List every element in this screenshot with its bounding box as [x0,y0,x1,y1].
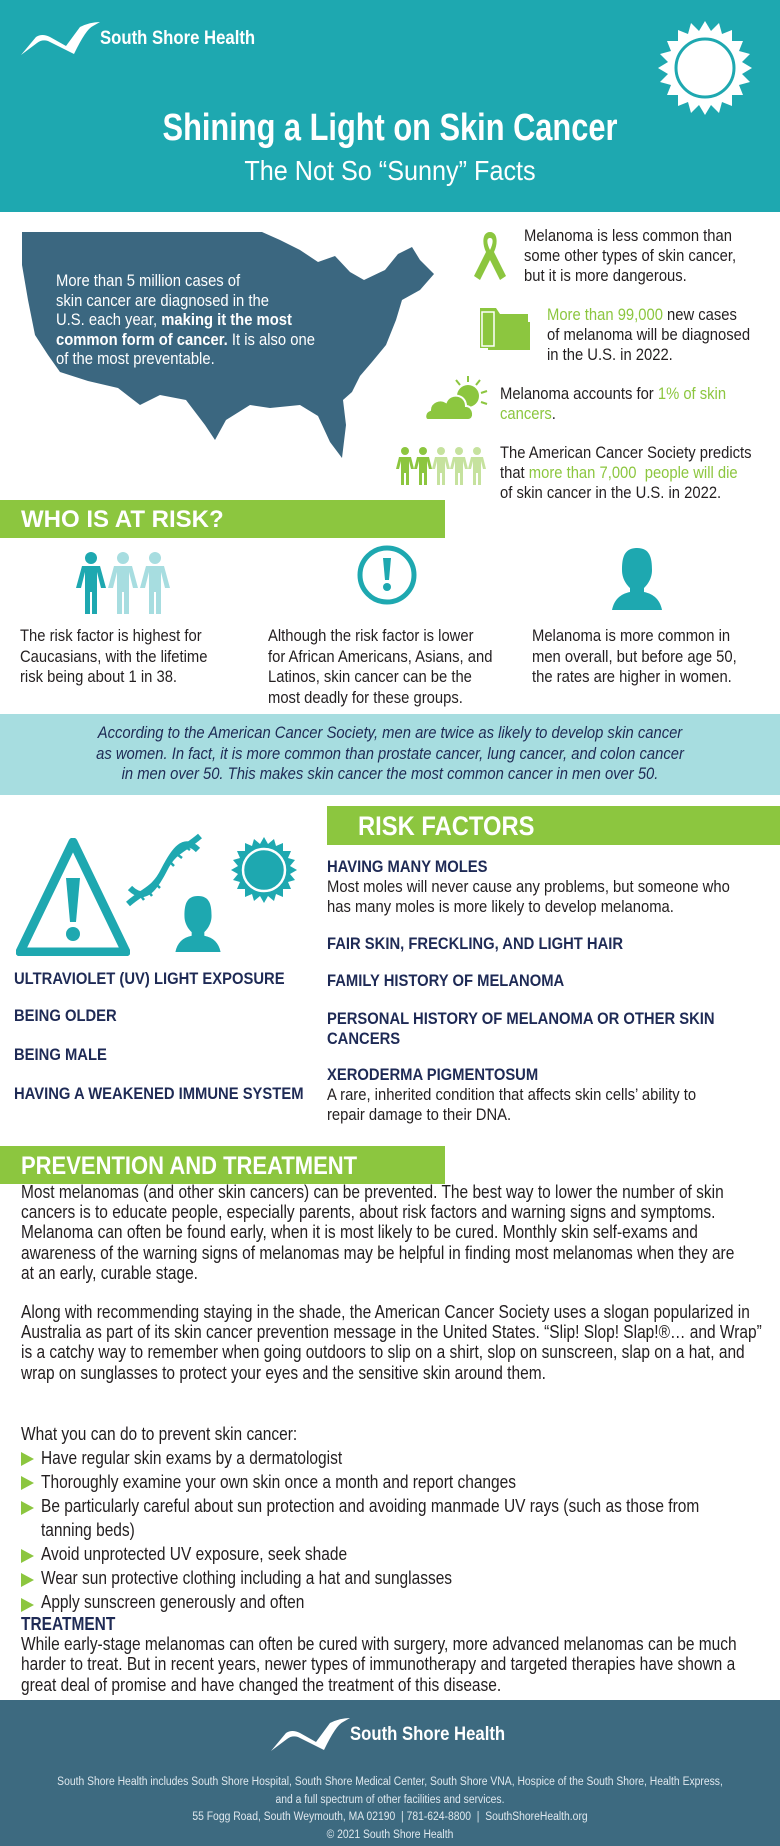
footer text [57,1776,723,1840]
fact: ribbon [474,226,736,285]
list: right risk factors: has many moles is more likely to develop melanoma. [327,897,674,916]
list: right risk factors: HAVING MANY MOLES [327,857,488,876]
logo: South Shore Health [100,28,255,49]
fact: folder: More than 99,000 new cases [547,305,737,324]
text: treatment [21,1614,737,1695]
fact: people: of skin cancer in the U.S. in 2022. [500,483,721,502]
list: prevention tips: Wear sun protective clothing including a hat and sunglasses [41,1568,452,1588]
icon: ribbon [474,232,506,280]
list: right risk factors: FAMILY HISTORY OF MELANOMA [327,971,564,990]
list: right risk factors: Most moles will never cause any problems, but someone who [327,877,730,896]
text: wrap on sunglasses to protect your eyes and the sensitive skin around them. [21,1363,546,1383]
title: Shining a Light on Skin Cancer [163,107,617,149]
fact: ribbon: Melanoma is less common than [524,226,732,245]
heading: prevention and treatment: PREVENTION AND TREATMENT [21,1152,357,1180]
column: caucasians: The risk factor is highest for [20,626,202,645]
list: right risk factors: XERODERMA PIGMENTOSUM [327,1065,538,1084]
list: left risk factors: BEING OLDER [14,1006,117,1025]
text: treatment: While early-stage melanomas can often be cured with surgery, more advanced melanomas can be much [21,1634,737,1654]
column: other groups: Latinos, skin cancer can be the [268,667,472,686]
icon: three people [76,552,170,614]
list: prevention tips [21,1424,699,1612]
icon: dna [126,834,202,906]
list: prevention tips: Have regular skin exams by a dermatologist [41,1448,342,1468]
text: is a catchy way to remember when going outdoors to slip on a shirt, slop on sunscreen, slap on a hat, and [21,1342,745,1362]
column: caucasians [20,552,207,686]
fact: ribbon: some other types of skin cancer, [524,246,736,265]
map text: More than 5 million cases of [56,271,240,290]
heading: who is at risk: WHO IS AT RISK? [21,506,224,533]
column: caucasians: Caucasians, with the lifetime [20,646,207,666]
logo [21,22,255,55]
icon: sun [658,21,752,115]
heading: risk factors [327,806,780,845]
map text: skin cancer are diagnosed in the [56,290,269,310]
text: prevention paragraphs: awareness of the warning signs of melanomas may be helpful in finding most melanomas when they are [21,1243,734,1263]
callout band: in men over 50. This makes skin cancer the most common cancer in men over 50. [122,764,658,783]
callout band: According to the American Cancer Society, men are twice as likely to develop skin cancer [98,723,682,742]
list: right risk factors: CANCERS [327,1029,400,1048]
icon: head [612,548,662,610]
footer text: © 2021 South Shore Health [327,1828,453,1840]
map text: common form of cancer. It is also one [56,330,315,348]
map panel [22,232,434,458]
text: Along with recommending staying in the shade, the American Cancer Society uses a slogan popularized in [21,1302,750,1322]
fact: cloud [426,376,726,423]
icon: bullet arrows [21,1452,34,1612]
fact: cloud: cancers. [500,404,556,423]
heading: who is at risk [0,500,445,538]
list: left risk factors: ULTRAVIOLET (UV) LIGHT EXPOSURE [14,969,285,988]
map text: of the most preventable. [56,349,215,368]
list: left risk factors: HAVING A WEAKENED IMMUNE SYSTEM [14,1084,304,1103]
footer text: 55 Fogg Road, South Weymouth, MA 02190 | 781-624-8800 | SouthShoreHealth.org [192,1811,588,1823]
footer logo [271,1718,505,1751]
column: other groups: most deadly for these groups. [268,688,463,706]
list: right risk factors: repair damage to their DNA. [327,1105,511,1124]
column: men: the rates are higher in women. [532,667,732,686]
list: left risk factors [14,969,304,1103]
footer [0,1700,780,1846]
callout band: as women. In fact, it is more common than prostate cancer, lung cancer, and colon cancer [96,744,684,762]
text: prevention paragraphs [21,1182,734,1283]
column: men: men overall, but before age 50, [532,646,737,666]
icon: folder [480,308,530,350]
list: right risk factors: PERSONAL HISTORY OF MELANOMA OR OTHER SKIN [327,1009,715,1028]
fact: people: that more than 7,000 people will die [500,463,738,482]
map text: U.S. each year, making it the most [56,310,292,329]
column: men: Melanoma is more common in [532,626,730,645]
text: prevention paragraphs: at an early, curable stage. [21,1263,198,1283]
callout band [0,714,780,795]
icon group: risk icons [16,834,297,956]
list: right risk factors: FAIR SKIN, FRECKLING, AND LIGHT HAIR [327,934,623,953]
text: prevention paragraphs: Melanoma can often be found early, when it is most likely to be cured. Monthly skin self-exams and [21,1222,698,1242]
column: other groups: for African Americans, Asians, and [268,646,492,666]
footer text: South Shore Health includes South Shore Hospital, South Shore Medical Center, South Shore VNA, Hospice of the South Shore, Health Express, [57,1776,723,1788]
subtitle: The Not So “Sunny” Facts [244,155,536,186]
map text [56,271,315,368]
list: prevention tips: Avoid unprotected UV exposure, seek shade [41,1544,347,1564]
list: prevention tips: Apply sunscreen generously and often [41,1592,304,1612]
list: left risk factors: BEING MALE [14,1045,107,1064]
list: right risk factors [327,857,730,1124]
icon: sun [231,837,297,903]
icon: people [396,447,486,485]
list: prevention tips: What you can do to prevent skin cancer: [21,1424,297,1444]
list: prevention tips: Be particularly careful about sun protection and avoiding manmade UV rays (such as those from [41,1496,699,1516]
column: other groups: Although the risk factor is lower [268,626,474,645]
icon: US map [22,232,434,458]
column: other groups [268,546,492,706]
icon: person [175,896,221,952]
heading: risk factors: RISK FACTORS [358,811,534,841]
fact: cloud: Melanoma accounts for 1% of skin [500,384,726,403]
column: men [532,548,737,686]
list: prevention tips: Thoroughly examine your own skin once a month and report changes [41,1472,516,1492]
text: treatment: harder to treat. But in recent years, newer types of immunotherapy and targeted therapies have shown a [21,1654,735,1674]
footer logo: South Shore Health [350,1724,505,1745]
fact: folder: in the U.S. in 2022. [547,345,673,364]
icon: sun cloud [426,376,488,419]
list: right risk factors: A rare, inherited condition that affects skin cells’ ability to [327,1085,696,1104]
text: Australia as part of its skin cancer prevention message in the United States. “Slip! Slop! Slap!®… and Wrap” [21,1322,762,1342]
column: caucasians: risk being about 1 in 38. [20,667,177,686]
text: treatment: great deal of promise and have changed the treatment of this disease. [21,1675,501,1695]
fact: people: The American Cancer Society predicts [500,443,752,462]
footer text: and a full spectrum of other facilities and services. [276,1794,504,1806]
fact: ribbon: but it is more dangerous. [524,266,687,285]
fact: people [396,443,752,502]
text: prevention paragraphs: Most melanomas (and other skin cancers) can be prevented. The best way to lower the number of skin [21,1182,724,1202]
fact: folder [480,305,750,364]
text: prevention paragraphs: cancers is to educate people, especially parents, about risk factors and warning signs and symptoms. [21,1202,715,1222]
fact: folder: of melanoma will be diagnosed [547,325,750,344]
heading: prevention and treatment [0,1146,445,1184]
list: prevention tips: tanning beds) [41,1520,135,1540]
icon: exclamation circle [358,546,416,604]
header [0,0,780,212]
icon: warning triangle [16,838,130,956]
text: treatment: TREATMENT [21,1614,115,1634]
